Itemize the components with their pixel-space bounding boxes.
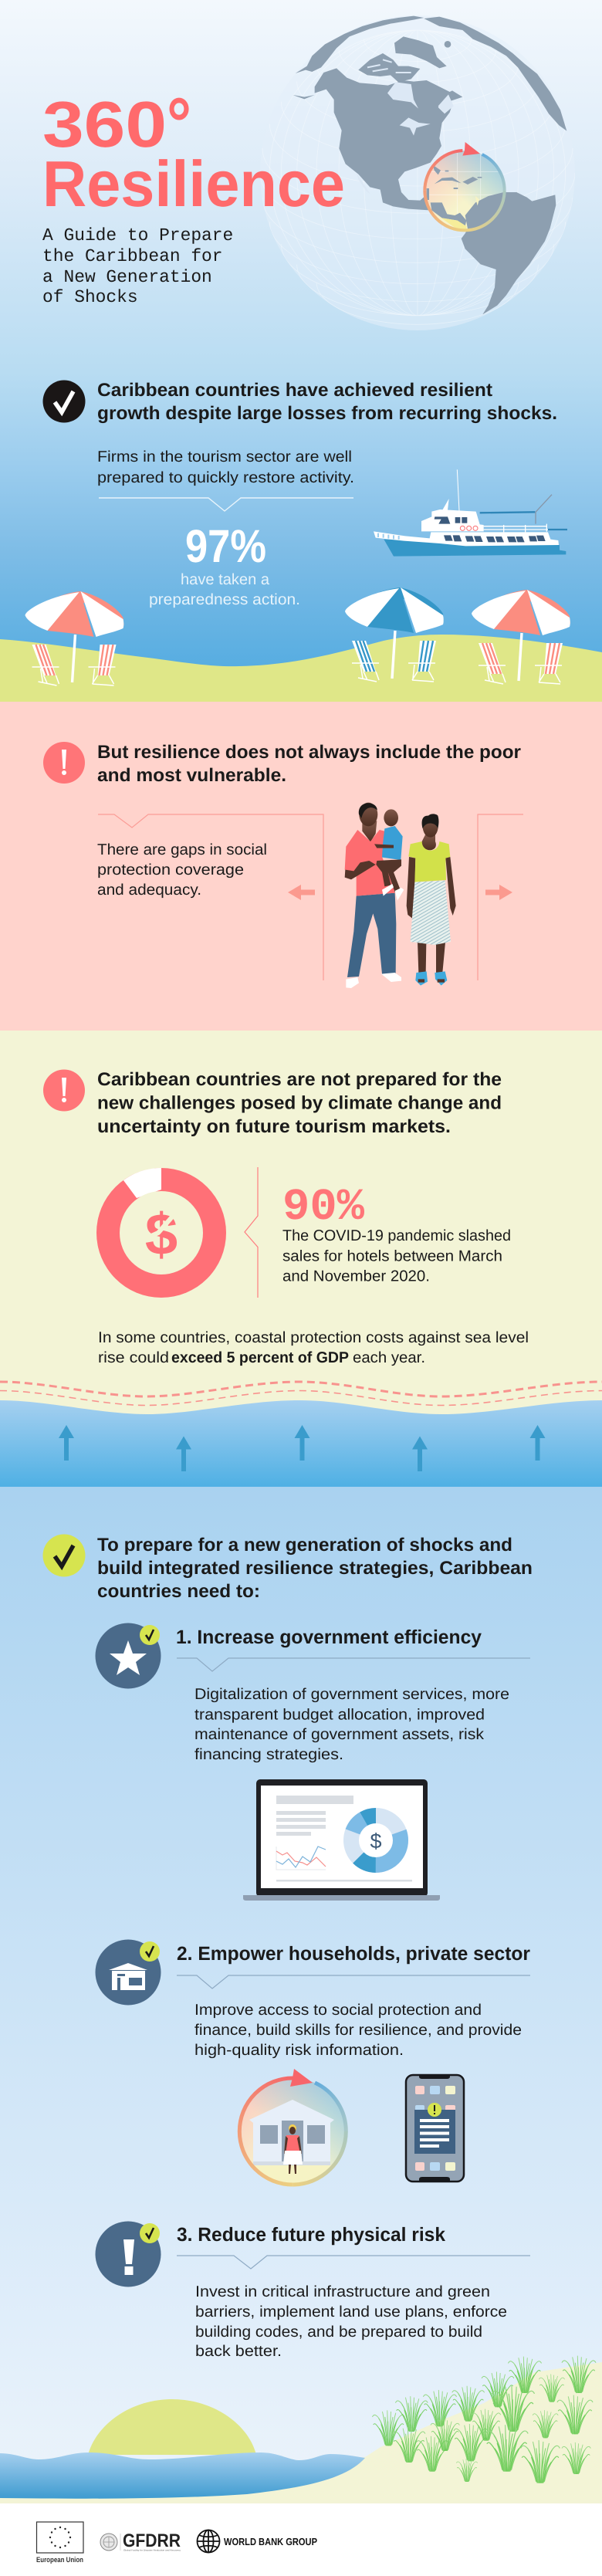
icon: right umbrella — [472, 590, 570, 684]
text: step 1 description: transparent budget allocation, improved — [194, 1706, 485, 1723]
text: step 2 description — [194, 2002, 522, 2059]
panel: recommendations — [0, 1487, 602, 2503]
statistic: 90 percent: 90% — [282, 1183, 364, 1233]
text: firms prepared: Firms in the tourism sector are well — [97, 449, 352, 465]
beach sand — [0, 635, 602, 702]
heading: poor and vulnerable: But resilience does not always include the poor — [97, 742, 521, 763]
heading: to prepare: build integrated resilience strategies, Caribbean — [97, 1558, 533, 1579]
logo: World Bank Group — [198, 2530, 317, 2553]
text: step 2 description: finance, build skills for resilience, and provide — [194, 2022, 522, 2039]
illustration: sun, sea and dune — [0, 2356, 602, 2503]
heading: not prepared: Caribbean countries are not prepared for the — [97, 1069, 502, 1090]
text: coastal protection costs: each year. — [353, 1349, 425, 1366]
logo: European Union — [36, 2522, 83, 2564]
logo: GFDRR: GFDRR — [123, 2530, 181, 2551]
title: ° — [167, 83, 191, 164]
Caribbean ring — [424, 151, 506, 231]
text: coastal protection costs: In some countries, coastal protection costs against sea level — [98, 1329, 529, 1346]
subtitle: of Shocks — [42, 287, 138, 307]
sea level rise — [0, 1400, 602, 1487]
heading: resilient growth: growth despite large losses from recurring shocks. — [97, 403, 557, 424]
heading: resilient growth: Caribbean countries have achieved resilient — [97, 380, 492, 401]
text: step 3 description: building codes, and be prepared to build — [195, 2324, 482, 2341]
title: Resilience — [42, 147, 345, 220]
heading: to prepare — [97, 1535, 533, 1602]
title — [42, 83, 345, 220]
text: step 3 description — [195, 2283, 507, 2360]
heading: not prepared: uncertainty on future tourism markets. — [97, 1116, 451, 1137]
icon: blue umbrella — [345, 587, 444, 682]
text: firms prepared: prepared to quickly restore activity. — [97, 469, 354, 486]
icon: exclamation — [96, 2222, 161, 2287]
heading: not prepared: new challenges posed by climate change and — [97, 1093, 502, 1113]
subtitle: A Guide to Prepare — [42, 225, 233, 245]
text: gaps in protection: and adequacy. — [97, 882, 201, 899]
text: step 1 description — [194, 1686, 509, 1763]
logo: GFDRR — [100, 2530, 181, 2552]
statistic: 97 percent: preparedness action. — [149, 591, 300, 608]
statistic: 97 percent: have taken a — [181, 571, 270, 588]
arrow: left — [288, 885, 315, 900]
heading: to prepare: countries need to: — [97, 1581, 260, 1602]
logo: European Union: European Union — [36, 2556, 83, 2564]
text: firms prepared — [97, 449, 354, 486]
icon: left umbrella — [25, 591, 123, 685]
icon: house — [96, 1939, 161, 2006]
figure: woman — [283, 2124, 303, 2174]
illustration: family — [345, 803, 456, 988]
statistic: 97 percent — [149, 520, 300, 608]
illustration: laptop: $ — [370, 1830, 382, 1853]
icon: lime check — [43, 1535, 85, 1576]
statistic: 97 percent: 97% — [185, 520, 266, 572]
heading: step 1: 1. Increase government efficiency — [176, 1627, 482, 1648]
panel: new challenges — [0, 1031, 602, 1487]
text: gaps in protection: There are gaps in social — [97, 841, 267, 858]
arrows: rising water — [59, 1425, 545, 1471]
panel: vulnerable groups — [0, 702, 602, 1031]
logo: GFDRR: Global Facility for Disaster Reduction and Recovery — [123, 2549, 181, 2552]
illustration: laptop — [243, 1779, 440, 1901]
text: step 2 description: high-quality risk information. — [194, 2042, 404, 2059]
text: step 1 description: maintenance of government assets, risk — [194, 1726, 485, 1743]
heading: poor and vulnerable: and most vulnerable. — [97, 765, 286, 786]
panel: hero and tourism resilience — [0, 0, 602, 702]
dune grass — [372, 2356, 596, 2483]
statistic: 90 percent: The COVID-19 pandemic slashed — [282, 1227, 511, 1244]
heading: step 3: 3. Reduce future physical risk — [177, 2224, 445, 2246]
heading: to prepare: To prepare for a new generation of shocks and — [97, 1535, 512, 1555]
donut chart: 90 percent: $ — [145, 1202, 178, 1268]
subtitle: a New Generation — [42, 267, 212, 287]
heading: resilient growth — [97, 380, 557, 424]
icon: boat — [374, 469, 567, 557]
text: coastal protection costs: rise could — [98, 1349, 169, 1366]
text: step 1 description: Digitalization of government services, more — [194, 1686, 509, 1703]
text: step 1 description: financing strategies. — [194, 1746, 343, 1763]
illustration: house in resilience ring — [239, 2069, 347, 2188]
text: coastal protection costs — [98, 1329, 529, 1366]
icon: star — [96, 1623, 161, 1689]
heading: not prepared — [97, 1069, 502, 1137]
text: step 3 description: Invest in critical infrastructure and green — [195, 2283, 490, 2300]
statistic: 90 percent — [282, 1183, 511, 1285]
title: 360 — [42, 88, 167, 161]
text: step 3 description: barriers, implement land use plans, enforce — [195, 2304, 507, 2320]
text: step 2 description: Improve access to social protection and — [194, 2002, 482, 2019]
text: step 3 description: back better. — [195, 2343, 282, 2360]
donut chart: 90 percent — [96, 1168, 226, 1298]
heading: step 2: 2. Empower households, private sector — [177, 1943, 530, 1965]
illustration: phone alert — [406, 2075, 464, 2182]
heading: poor and vulnerable — [97, 742, 521, 786]
subtitle: the Caribbean for — [42, 246, 223, 266]
arrow: right — [485, 885, 512, 900]
statistic: 90 percent: sales for hotels between March — [282, 1247, 502, 1264]
text: gaps in protection — [97, 841, 267, 899]
statistic: 90 percent: and November 2020. — [282, 1268, 430, 1285]
subtitle — [42, 225, 233, 307]
icon: alert — [43, 742, 85, 784]
globe illustration — [260, 15, 575, 330]
logo: World Bank Group: WORLD BANK GROUP — [224, 2536, 317, 2547]
panel: footer logos — [0, 2503, 602, 2576]
icon: alert — [43, 1070, 85, 1112]
icon: black check — [43, 380, 85, 423]
text: gaps in protection: protection coverage — [97, 861, 244, 878]
text: coastal protection costs: exceed 5 percent of GDP — [171, 1349, 349, 1366]
